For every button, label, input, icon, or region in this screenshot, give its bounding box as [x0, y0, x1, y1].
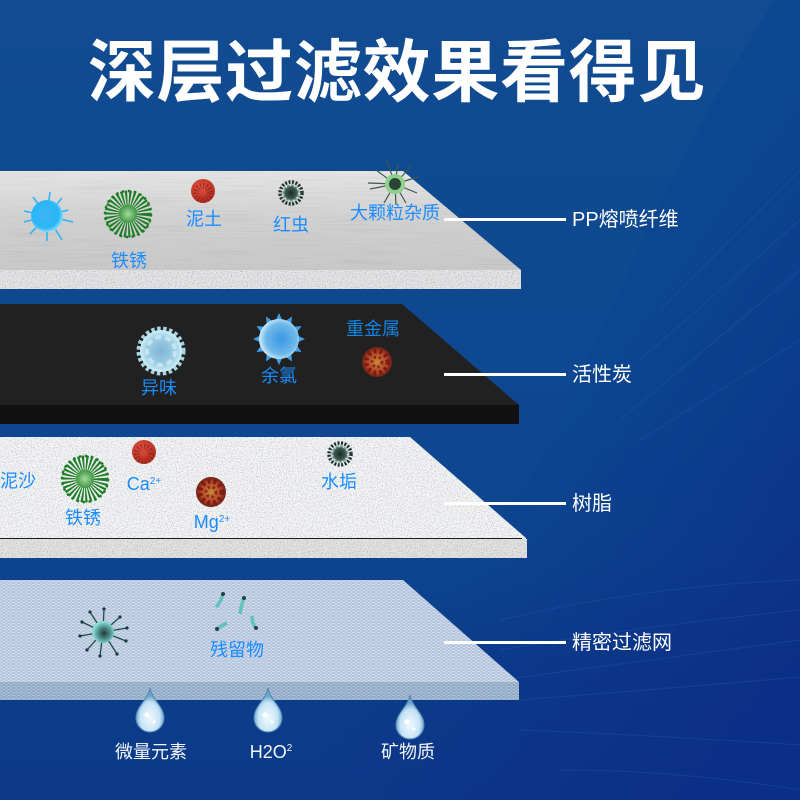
- icon: teal virus: [78, 607, 129, 658]
- layer name: PP: PP熔喷纤维: [572, 208, 679, 231]
- icon: orange ball: [362, 347, 392, 377]
- leader line: resin: [444, 502, 566, 505]
- label: 红虫: [273, 215, 309, 235]
- panel: resin layer: [0, 437, 527, 558]
- output label: H2O: 2: [287, 743, 293, 754]
- icon: orange ball: [196, 477, 226, 507]
- layer name: carbon: 活性炭: [572, 363, 632, 386]
- label: 异味: [141, 378, 177, 398]
- title: 深层过滤效果看得见: [88, 35, 706, 111]
- label: 2+: [150, 476, 161, 487]
- layer side edge: PP: [0, 270, 521, 289]
- icon: water drop: [396, 695, 424, 739]
- icon: water drop: [254, 688, 282, 732]
- panel: PP melt-blown layer: [0, 161, 521, 289]
- label: 残留物: [210, 640, 264, 660]
- label: 铁锈: [65, 508, 101, 528]
- leader line: PP: [444, 218, 566, 221]
- divider edge: [0, 538, 522, 539]
- icon: green virus: [62, 456, 108, 502]
- icon: dark speckled ball: [329, 443, 351, 465]
- icon: water drop: [136, 688, 164, 732]
- layer side edge: mesh: [0, 682, 519, 700]
- label: 2+: [219, 514, 230, 525]
- layer name: mesh: 精密过滤网: [572, 631, 672, 654]
- icon: spiky green particle: [368, 161, 418, 205]
- layer name: resin: 树脂: [572, 492, 612, 515]
- label: Mg: [194, 512, 219, 532]
- leader line: mesh: [444, 641, 566, 644]
- icon: sky blue virus: [253, 313, 305, 365]
- icon: green virus: [105, 191, 151, 237]
- layer top surface: resin: [0, 437, 526, 539]
- label: 泥沙: [0, 471, 36, 491]
- layer side edge: resin: [0, 539, 527, 558]
- label: 泥土: [186, 209, 222, 229]
- layer top surface: carbon: [0, 304, 519, 406]
- label: 大颗粒杂质: [350, 203, 440, 223]
- label: 重金属: [346, 319, 400, 339]
- label: Ca: [127, 474, 150, 494]
- output label: H2O: H2O: [250, 742, 287, 762]
- layer top surface: mesh: [0, 580, 519, 683]
- output label: minerals: 矿物质: [381, 742, 435, 762]
- icon: cyan virus: [24, 192, 73, 241]
- icon: red ball: [191, 179, 215, 203]
- leader line: carbon: [444, 373, 566, 376]
- icon: dark speckled ball: [280, 182, 302, 204]
- panel: precision mesh layer: [0, 580, 519, 739]
- label: 余氯: [261, 366, 297, 386]
- panel: activated carbon layer: [0, 304, 519, 424]
- output label: trace elements: 微量元素: [115, 742, 187, 762]
- layer side edge: carbon: [0, 405, 519, 424]
- icon: residue fragments: [215, 592, 258, 631]
- label: 铁锈: [111, 251, 147, 271]
- label: 水垢: [321, 472, 357, 492]
- icon: red ball: [132, 440, 156, 464]
- icon: pale blue virus: [138, 328, 184, 374]
- layer top surface: PP: [0, 171, 521, 271]
